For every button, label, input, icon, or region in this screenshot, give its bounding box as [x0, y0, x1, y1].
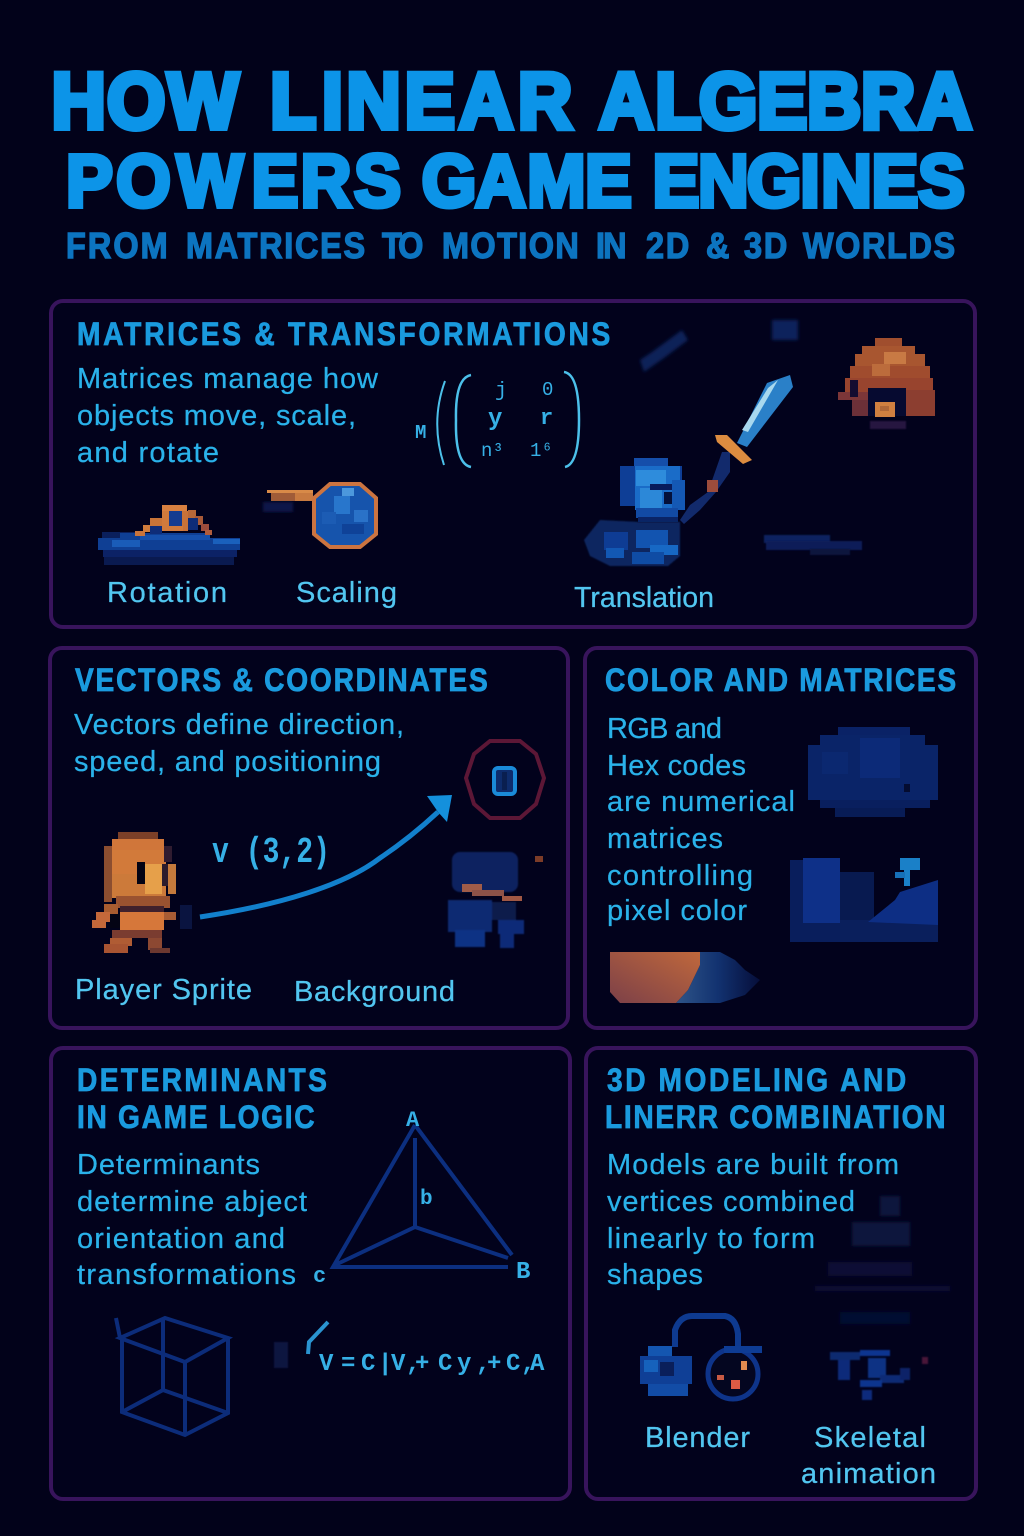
matrix formula: 0 [542, 379, 553, 401]
text: color description: controlling [607, 860, 753, 892]
matrix formula: M [415, 422, 426, 444]
matrix formula: y [488, 406, 502, 433]
diagram: triangle ABC pyramid: B [516, 1259, 530, 1286]
text: determinants description: Determinants [77, 1149, 260, 1181]
heading: 3D modeling and linear combination [605, 1063, 946, 1135]
label: skeletal animation [801, 1422, 936, 1490]
text: modeling description: vertices combined [607, 1186, 855, 1218]
heading: determinants in game logic: IN GAME LOGIC [77, 1100, 315, 1135]
formula: linear combination [274, 1322, 545, 1378]
text: color description: RGB and [607, 713, 722, 745]
diagram: triangle ABC pyramid [313, 1108, 530, 1289]
panel: matrices and transformations [51, 301, 975, 627]
panel: determinants in game logic [51, 1048, 570, 1499]
label: player sprite: Player Sprite [75, 974, 252, 1006]
label: vector v(3,2): v (3,2) [212, 832, 330, 873]
subtitle: MOTION [442, 226, 579, 266]
text: color description: Hex codes [607, 750, 746, 782]
subtitle: MATRICES [186, 226, 365, 266]
heading: determinants in game logic [77, 1063, 327, 1135]
icon: orange house sprite [838, 338, 935, 429]
matrix formula: 1⁶ [530, 440, 553, 462]
heading: color and matrices: COLOR AND MATRICES [605, 663, 956, 698]
text: determinants description: determine abject [77, 1186, 307, 1218]
heading: matrices and transformations: MATRICES & TRANSFORMATIONS [77, 317, 610, 352]
subtitle: 2D [646, 226, 689, 266]
label: skeletal animation: Skeletal [814, 1422, 926, 1454]
heading: determinants in game logic: DETERMINANTS [77, 1063, 327, 1098]
matrix formula: j [495, 380, 507, 403]
icon: blue blob [808, 727, 938, 817]
icon: blender headset [640, 1316, 762, 1399]
text: modeling description: linearly to form [607, 1223, 815, 1255]
text: matrices description: and rotate [77, 437, 219, 469]
text: modeling description: Models are built from [607, 1149, 899, 1181]
heading: 3D modeling and linear combination: LINERR COMBINATION [605, 1100, 946, 1135]
text: matrices description: Matrices manage how [77, 363, 379, 395]
diagram: wireframe cube [116, 1318, 228, 1435]
formula: linear combination: V=C|V,+Cy,+C,A [319, 1351, 545, 1378]
text: determinants description: transformations [77, 1259, 296, 1291]
title [52, 57, 972, 223]
panel: 3D modeling and linear combination [586, 1048, 976, 1499]
subtitle: 3D [744, 226, 787, 266]
icon: scaling magnifier sprite [263, 484, 376, 547]
title: HOW LINEAR ALGEBRA [52, 57, 972, 145]
label: skeletal animation: animation [801, 1458, 936, 1490]
text: color description [607, 713, 795, 927]
text: color description: are numerical [607, 786, 795, 818]
text: matrices description: objects move, scale, [77, 400, 356, 432]
subtitle: WORLDS [803, 226, 955, 266]
title: POWERS GAME ENGINES [66, 141, 965, 223]
icon: dim character silhouette [815, 1196, 950, 1324]
label: scaling: Scaling [296, 577, 397, 609]
icon: skeletal animation sprite [830, 1350, 928, 1400]
subtitle: IN [596, 226, 627, 266]
label: rotation: Rotation [107, 577, 227, 609]
text: vectors description [74, 709, 404, 778]
panel: color and matrices [585, 648, 976, 1028]
text: vectors description: speed, and positioning [74, 746, 381, 778]
heading: 3D modeling and linear combination: 3D MODELING AND [607, 1063, 906, 1098]
text: determinants description [77, 1149, 307, 1291]
icon: dim sky specks [640, 320, 798, 372]
icon: orange to blue gradient swatch [610, 952, 760, 1003]
heading: vectors and coordinates: VECTORS & COORDINATES [75, 663, 488, 698]
text: matrices description [77, 363, 379, 469]
matrix formula [415, 372, 579, 467]
text: modeling description [607, 1149, 899, 1291]
matrix formula: r [540, 406, 553, 431]
text: determinants description: orientation and [77, 1223, 285, 1255]
subtitle: FROM [66, 226, 168, 266]
icon: rotation boat sprite [98, 505, 240, 565]
text: modeling description: shapes [607, 1259, 703, 1291]
subtitle: & [706, 226, 729, 266]
icon: translation knight sprite [584, 375, 862, 566]
panel: vectors and coordinates [50, 648, 568, 1028]
label: translation: Translation [574, 582, 714, 614]
text: vectors description: Vectors define direction, [74, 709, 404, 741]
diagram: triangle ABC pyramid: b [420, 1188, 433, 1211]
icon: player sprite [92, 832, 192, 953]
icon: blue landscape [790, 858, 938, 942]
diagram: triangle ABC pyramid: A [406, 1108, 420, 1133]
text: color description: matrices [607, 823, 723, 855]
icon: background sprite [448, 852, 543, 948]
diagram: triangle ABC pyramid: c [313, 1264, 326, 1289]
arrow: vector v [200, 795, 452, 917]
label: blender: Blender [645, 1422, 750, 1454]
text: color description: pixel color [607, 895, 747, 927]
subtitle [66, 226, 955, 266]
icon: target ring [466, 741, 544, 818]
matrix formula: n³ [481, 440, 504, 462]
label: background: Background [294, 976, 455, 1008]
subtitle: TO [382, 226, 423, 266]
